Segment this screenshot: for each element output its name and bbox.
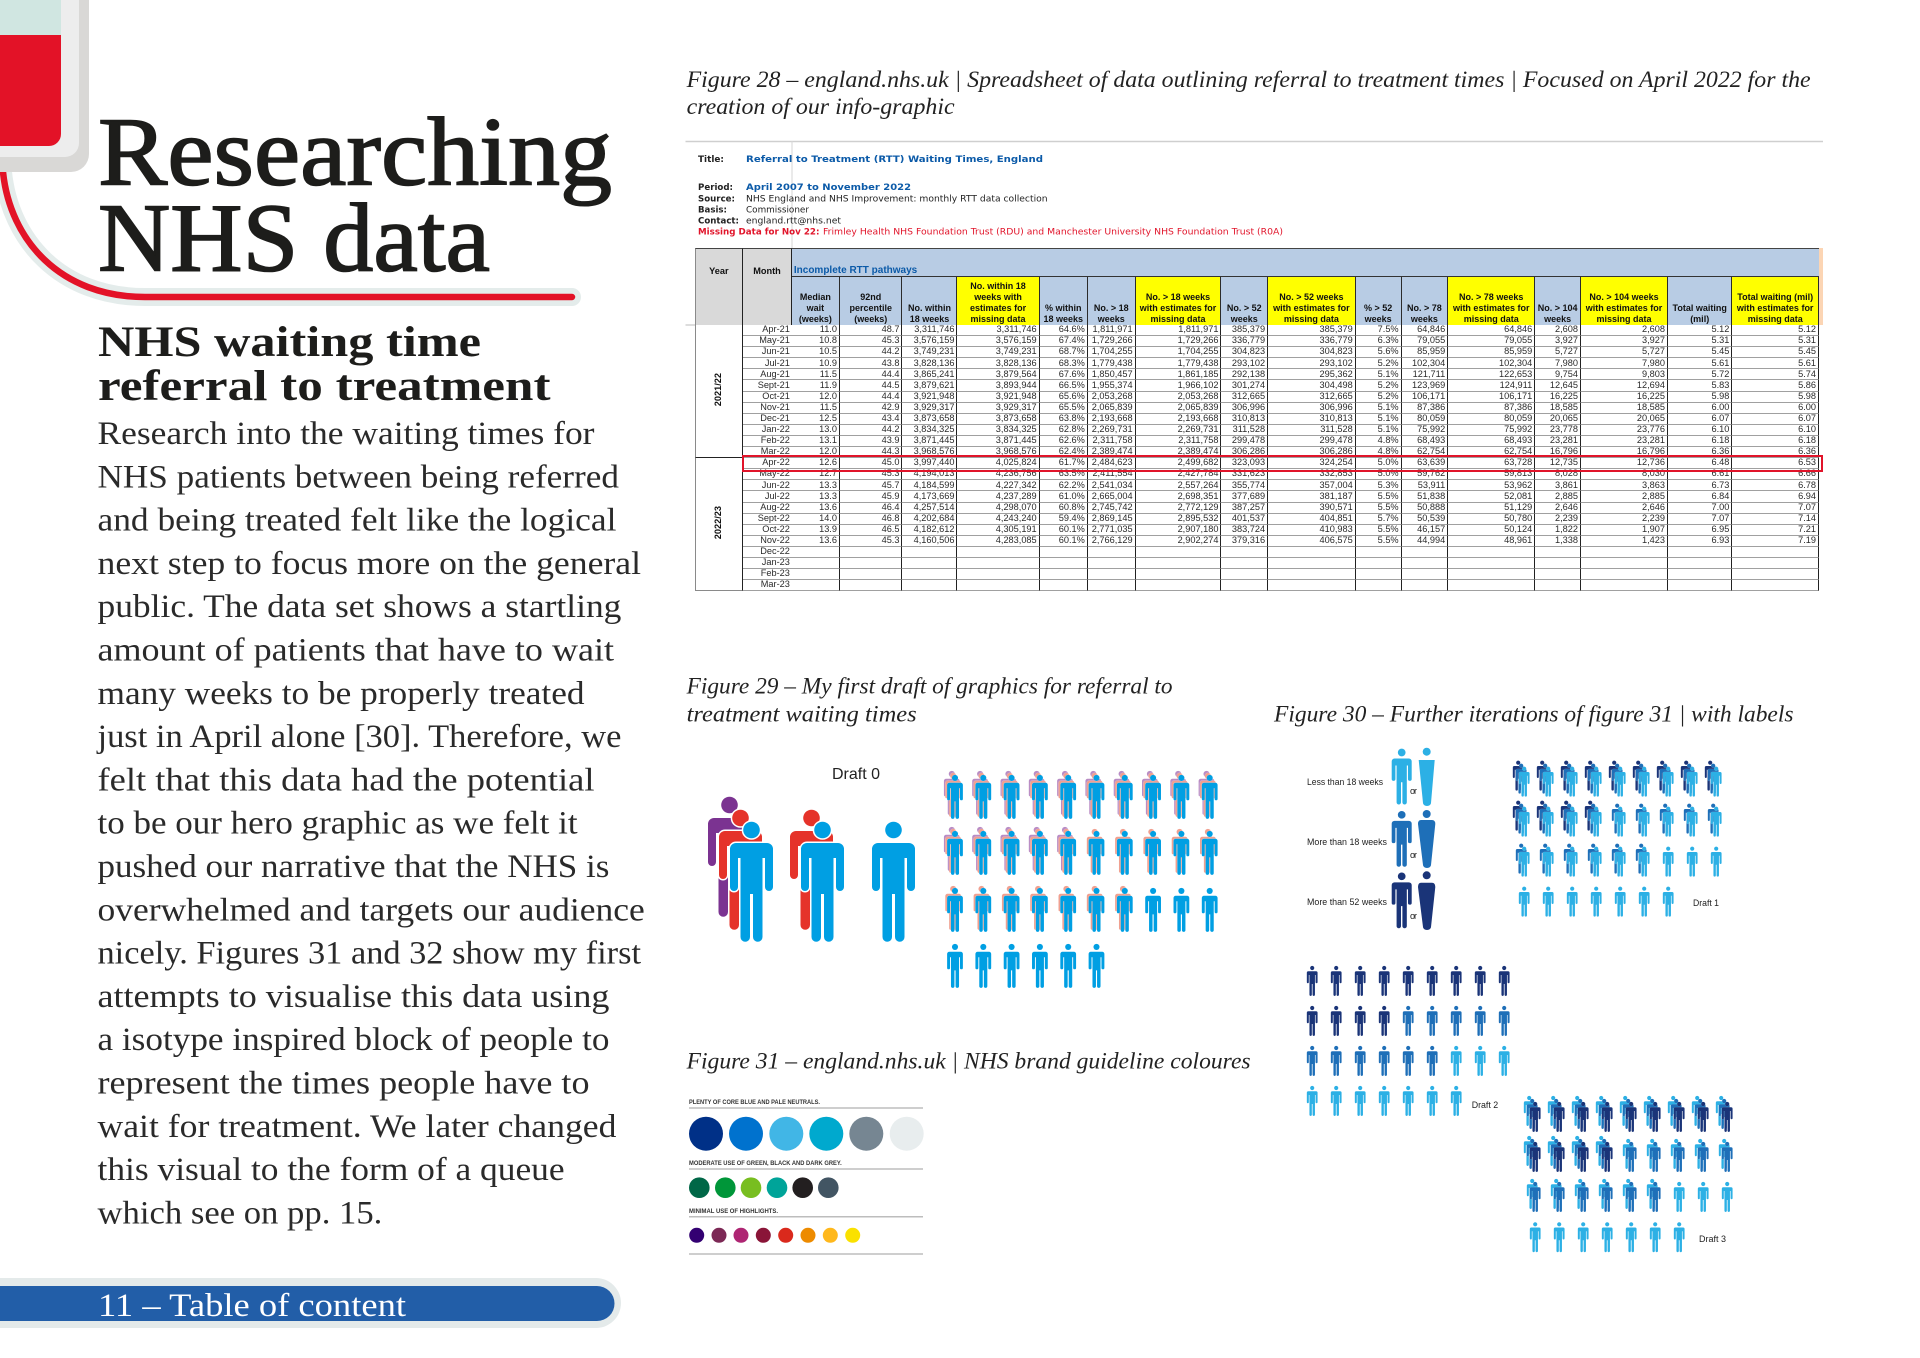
- spreadsheet table: with estimates for: [1737, 303, 1813, 313]
- spreadsheet table: No. > 78 weeks: [1459, 292, 1523, 302]
- spreadsheet header text: england.rtt@nhs.net: [746, 216, 842, 226]
- spreadsheet table: weeks: [1231, 314, 1258, 324]
- spreadsheet table: missing data: [971, 314, 1026, 324]
- spreadsheet table: No. > 18: [1094, 303, 1129, 313]
- body text: next step to focus more on the general: [97, 546, 641, 582]
- spreadsheet table: 18 weeks: [910, 314, 949, 324]
- title: NHS data: [98, 184, 490, 292]
- figure 29 caption: Figure 29 – My first draft of graphics for referral to: [686, 674, 1173, 698]
- spreadsheet table: No. > 104: [1538, 303, 1577, 313]
- spreadsheet table: % within: [1045, 303, 1082, 313]
- footer page bar: [0, 1278, 621, 1328]
- figure 29 caption: treatment waiting times: [687, 702, 917, 726]
- figure 31 colour palette: MODERATE USE OF GREEN, BLACK AND DARK GREY.: [689, 1160, 842, 1167]
- body text: Research into the waiting times for: [97, 416, 595, 452]
- figure 30 legend: More than 18 weeks: [1307, 837, 1387, 847]
- spreadsheet table: weeks: [1544, 314, 1571, 324]
- spreadsheet table: with estimates for: [1453, 303, 1529, 313]
- draft 2 people grid: [1307, 966, 1510, 1116]
- spreadsheet table: 2021/22: [713, 373, 723, 406]
- spreadsheet header text: Frimley Health NHS Foundation Trust (RDU) and Manchester University NHS Foundation Trust (R0A): [823, 228, 1283, 238]
- spreadsheet table: (weeks): [854, 314, 887, 324]
- body text: felt that this data had the potential: [97, 762, 595, 798]
- spreadsheet table: No. > 52: [1227, 303, 1262, 313]
- spreadsheet table: weeks with: [974, 292, 1022, 302]
- spreadsheet header text: Missing Data for Nov 22:: [698, 228, 820, 238]
- spreadsheet table: wait: [807, 303, 824, 313]
- spreadsheet table: missing data: [1464, 314, 1519, 324]
- draft 3 label: Draft 3: [1699, 1234, 1726, 1244]
- subheading: referral to treatment: [98, 363, 551, 410]
- figure 30 legend: or: [1410, 786, 1417, 796]
- draft 0 people grid: [944, 771, 1218, 988]
- figure 29 caption: [686, 674, 1173, 726]
- figure 28 caption: [686, 67, 1811, 119]
- spreadsheet table: 18 weeks: [1043, 314, 1083, 324]
- spreadsheet table: estimates for: [970, 303, 1026, 313]
- decorative tube and red line: [0, 0, 572, 297]
- spreadsheet header text: [686, 141, 1823, 325]
- figure 30 legend: or: [1410, 911, 1417, 921]
- spreadsheet table: 92nd: [860, 292, 881, 302]
- spreadsheet header text: Basis:: [698, 206, 727, 216]
- figure 30 legend: Less than 18 weeks: [1307, 777, 1383, 787]
- spreadsheet header text: Contact:: [698, 216, 739, 226]
- subheading: NHS waiting time: [98, 319, 481, 366]
- body text: many weeks to be properly treated: [97, 676, 585, 712]
- spreadsheet table: [695, 248, 1823, 591]
- figure 31 colour palette: MINIMAL USE OF HIGHLIGHTS.: [689, 1208, 778, 1215]
- spreadsheet table: Median: [800, 292, 831, 302]
- body text: NHS patients between being referred: [97, 459, 619, 495]
- body text: and being treated felt like the logical: [97, 503, 616, 539]
- spreadsheet header text: NHS England and NHS Improvement: monthly RTT data collection: [746, 194, 1048, 204]
- draft 1 label: Draft 1: [1693, 898, 1719, 908]
- spreadsheet table: with estimates for: [1140, 303, 1216, 313]
- spreadsheet table: No. > 52 weeks: [1279, 292, 1344, 302]
- spreadsheet table: No. > 78: [1407, 303, 1442, 313]
- figure 28 caption: creation of our info-graphic: [687, 94, 955, 119]
- body text: which see on pp. 15.: [97, 1195, 382, 1231]
- figure 30 caption: Figure 30 – Further iterations of figure 31 | with labels: [1273, 702, 1794, 726]
- spreadsheet table: weeks: [1365, 314, 1392, 324]
- spreadsheet table: No. within 18: [970, 281, 1026, 291]
- body text: public. The data set shows a startling: [97, 589, 621, 625]
- draft 0 label: Draft 0: [832, 766, 880, 783]
- figure 30 legend: or: [1410, 850, 1417, 860]
- body text: represent the times people have to: [97, 1065, 590, 1102]
- spreadsheet table: missing data: [1284, 314, 1339, 324]
- spreadsheet table: No. within: [908, 303, 951, 313]
- body text: attempts to visualise this data using: [97, 979, 609, 1015]
- body text: nicely. Figures 31 and 32 show my first: [97, 936, 641, 972]
- spreadsheet table: percentile: [849, 303, 892, 313]
- figure 31 caption: Figure 31 – england.nhs.uk | NHS brand guideline coloures: [686, 1048, 1251, 1074]
- body text: just in April alone [30]. Therefore, we: [96, 719, 621, 755]
- spreadsheet header text: Commissioner: [746, 206, 809, 216]
- spreadsheet table: Month: [753, 266, 781, 276]
- figure 31 colour palette: [689, 1099, 924, 1254]
- spreadsheet table: with estimates for: [1273, 303, 1350, 313]
- figure 30 legend: More than 52 weeks: [1307, 897, 1387, 907]
- body text: amount of patients that have to wait: [97, 632, 614, 669]
- spreadsheet table: weeks: [1098, 314, 1125, 324]
- body text: this visual to the form of a queue: [97, 1152, 565, 1188]
- body text: [96, 416, 645, 1231]
- spreadsheet header text: Title:: [698, 155, 724, 165]
- spreadsheet table: weeks: [1411, 314, 1438, 324]
- spreadsheet table: missing data: [1748, 314, 1803, 324]
- spreadsheet table: (weeks): [799, 314, 832, 324]
- figure 31 colour palette: PLENTY OF CORE BLUE AND PALE NEUTRALS.: [689, 1099, 820, 1106]
- spreadsheet table: Total waiting (mil): [1737, 292, 1813, 302]
- spreadsheet table: Incomplete RTT pathways: [794, 265, 917, 276]
- spreadsheet header text: Source:: [698, 194, 735, 204]
- spreadsheet table: (mil): [1690, 314, 1709, 324]
- draft 3 people grid: [1524, 1096, 1733, 1252]
- spreadsheet table: with estimates for: [1586, 303, 1662, 313]
- title: Researching: [98, 98, 612, 206]
- red highlight box: April 2022 row: [742, 455, 1823, 472]
- body text: wait for treatment. We later changed: [97, 1109, 617, 1145]
- draft 1 people grid: [1513, 761, 1722, 917]
- spreadsheet table: Year: [709, 266, 729, 276]
- spreadsheet table: missing data: [1596, 314, 1652, 324]
- spreadsheet header text: Referral to Treatment (RTT) Waiting Times, England: [746, 155, 1043, 165]
- spreadsheet table: No. > 18 weeks: [1146, 292, 1210, 302]
- draft 2 label: Draft 2: [1472, 1100, 1498, 1110]
- draft 0 large people: [708, 797, 915, 942]
- footer page bar: 11 – Table of content: [98, 1288, 406, 1324]
- spreadsheet header text: Period:: [698, 183, 733, 193]
- body text: to be our hero graphic as we felt it: [97, 806, 578, 842]
- figure 28 caption: Figure 28 – england.nhs.uk | Spreadsheet of data outlining referral to treatment times | Focused on April 2022 for the: [686, 67, 1811, 92]
- body text: pushed our narrative that the NHS is: [97, 849, 609, 885]
- figure 30 legend: [1307, 748, 1435, 930]
- title: [98, 98, 612, 292]
- spreadsheet table: % > 52: [1364, 303, 1392, 313]
- subheading: [98, 319, 551, 410]
- spreadsheet table: 2022/23: [713, 506, 723, 540]
- spreadsheet table: missing data: [1151, 314, 1206, 324]
- spreadsheet header text: April 2007 to November 2022: [746, 183, 911, 193]
- body text: a isotype inspired block of people to: [97, 1022, 609, 1058]
- spreadsheet table: No. > 104 weeks: [1589, 292, 1659, 302]
- body text: overwhelmed and targets our audience: [97, 892, 645, 928]
- spreadsheet table: Total waiting: [1673, 303, 1727, 313]
